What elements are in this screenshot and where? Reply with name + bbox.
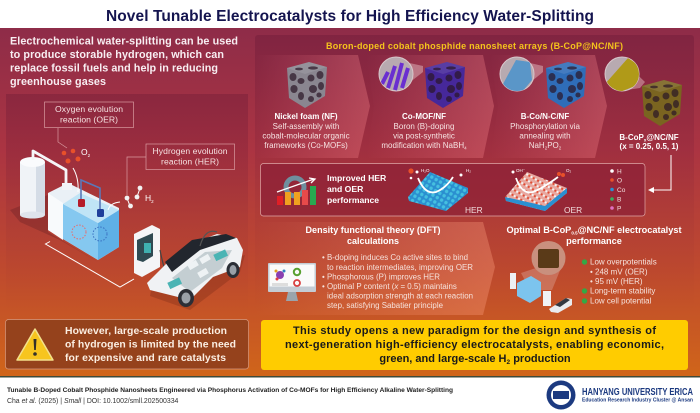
panel: DFT calculations: to reaction intermediates, improving OER xyxy=(327,263,473,272)
panel: optimal performance: performance xyxy=(566,236,622,246)
intro text xyxy=(10,36,238,88)
step: B-Co/N-C xyxy=(490,55,607,158)
step: Co-MOF xyxy=(366,55,494,158)
illustration: electrolyser and storage tank xyxy=(10,151,120,262)
panel: DFT calculations: step, satisfying Sabatier principle xyxy=(327,301,444,310)
chart: OER surface: OER xyxy=(564,205,582,215)
panel: DFT calculations: ideal adsorption strength at each reaction xyxy=(327,292,473,300)
panel: optimal performance: @NC/NF electrocatalyst xyxy=(578,225,682,235)
callout: OER: reaction (OER) xyxy=(60,114,118,124)
step: B-Co/N-C: Phosphorylation via xyxy=(510,122,580,131)
panel: improved performance xyxy=(260,164,645,216)
legend: atoms: O xyxy=(617,178,622,184)
callout: HER: Hydrogen evolution xyxy=(152,146,228,156)
step: nickel foam xyxy=(255,55,370,158)
panel: DFT calculations: • Phosphorous (P) improves HER xyxy=(322,272,440,282)
step: Co-MOF: 4 xyxy=(464,146,467,150)
citation: Cha et al. (2025) | Small | DOI: 10.1002/smll.202500334 xyxy=(7,398,179,405)
ions xyxy=(72,225,86,239)
chart: OER surface xyxy=(505,168,582,215)
callout: HER xyxy=(127,144,234,195)
title: Novel Tunable Electrocatalysts for High Efficiency Water-Splitting xyxy=(106,8,594,25)
step: B-Co/N-C: B-Co/N-C/NF xyxy=(521,112,569,121)
list: performance bullets: • 95 mV (HER) xyxy=(590,277,643,286)
chart: OER surface: O₂ xyxy=(566,168,572,173)
panel: DFT calculations: Density functional theory (DFT) xyxy=(306,225,440,235)
electrodes xyxy=(81,180,100,210)
step: B-CoP final: x xyxy=(644,138,647,142)
panel: warning: for expensive and rare catalysts xyxy=(65,353,226,364)
intro text: to produce storable hydrogen, which can xyxy=(10,49,224,61)
panel: left illustration backdrop xyxy=(6,94,248,314)
step: B-CoP final: B-CoP xyxy=(619,133,644,142)
list: performance bullets: Long-term stability xyxy=(590,286,655,296)
legend: atoms: B xyxy=(617,196,621,204)
step: B-Co/N-C: NaH xyxy=(529,141,545,150)
logo: university name: Education Research Industry Cluster @ Ansan xyxy=(582,398,693,404)
panel: DFT calculations: • B-doping induces Co active sites to bind xyxy=(322,253,468,262)
panel: warning: However, large-scale production xyxy=(65,326,227,337)
chart: OER surface: OH⁻ xyxy=(516,168,526,173)
chart: HER surface: HER xyxy=(465,205,483,215)
step: B-Co/N-C: annealing with xyxy=(519,132,571,140)
panel: DFT calculations: calculations xyxy=(347,236,399,246)
icon: oxygen molecules xyxy=(62,147,91,164)
panel: improved performance: performance xyxy=(327,195,379,205)
icon: oxygen molecules: 2 xyxy=(88,153,91,158)
legend: atoms: P xyxy=(617,206,621,212)
icon: gear and bars xyxy=(277,178,316,205)
chart: HER surface: H₂ xyxy=(466,168,471,173)
icon: hydrogen molecules: H xyxy=(145,193,151,203)
panel: DFT calculations xyxy=(255,222,495,315)
panel: warning xyxy=(6,320,248,369)
storage tank xyxy=(20,157,45,218)
chart: HER surface: H₂O xyxy=(421,168,430,173)
step: Co-MOF: Boron (B)-doping xyxy=(394,122,454,131)
panel: optimal performance: 0.5 xyxy=(571,230,578,236)
panel: conclusion: production xyxy=(510,353,571,365)
list: performance bullets: • 248 mV (OER) xyxy=(590,268,648,276)
step: nickel foam: cobalt-molecular organic xyxy=(262,132,350,140)
panel: warning: of hydrogen is limited by the need xyxy=(65,340,236,350)
list: performance bullets: Low overpotentials xyxy=(590,258,657,266)
legend: atoms: Co xyxy=(617,187,626,194)
callout: HER: reaction (HER) xyxy=(161,156,219,166)
arrow: to performance box xyxy=(648,155,671,193)
panel: improved performance: Improved HER xyxy=(327,173,387,183)
callout: OER xyxy=(44,102,134,148)
chart: HER surface xyxy=(408,168,483,215)
step: B-CoP final xyxy=(605,57,682,151)
circuit line xyxy=(46,242,134,287)
step: nickel foam: Nickel foam (NF) xyxy=(274,112,338,121)
callout: OER: Oxygen evolution xyxy=(55,104,123,114)
icon: warning triangle xyxy=(17,329,53,360)
intro text: Electrochemical water-splitting can be used xyxy=(10,36,238,48)
step: B-CoP final: (x = 0.25, 0.5, 1) xyxy=(620,142,679,151)
logo: university name xyxy=(582,387,693,404)
step: B-Co/N-C: PO xyxy=(547,141,559,150)
illustration: charging station xyxy=(134,225,167,277)
icon: hydrogen molecules: 2 xyxy=(151,199,154,204)
intro text: replace fossil fuels and help in reducing xyxy=(10,62,218,74)
arrows xyxy=(73,168,78,192)
pipe xyxy=(33,151,66,186)
icon: mini system xyxy=(510,241,572,313)
panel: improved performance: and OER xyxy=(327,184,364,194)
step: Co-MOF: modification with NaBH xyxy=(381,141,464,150)
step: B-CoP final: @NC/NF xyxy=(646,133,679,142)
panel: DFT calculations: • Optimal P content (x = 0.5) maintains xyxy=(322,282,457,291)
illustration: hydrogen car xyxy=(147,231,245,310)
step: B-Co/N-C: 2 xyxy=(545,146,548,150)
citation xyxy=(7,387,453,405)
icon: monitor xyxy=(268,263,316,301)
panel: optimal performance xyxy=(506,225,682,313)
step: nickel foam: Self-assembly with xyxy=(273,122,339,131)
panel: conclusion: This study opens a new paradigm for the design and synthesis of xyxy=(293,325,656,337)
citation: Tunable B-Doped Cobalt Phosphide Nanosheets Engineered via Phosphorus Activation of Co-MOFs for High Efficiency Alkaline Water-Splitting xyxy=(7,387,453,394)
panel: conclusion: 2 xyxy=(507,359,511,366)
intro text: greenhouse gases xyxy=(10,76,106,88)
logo: university seal xyxy=(546,380,576,410)
step: Co-MOF: via post-synthetic xyxy=(393,132,455,140)
list: performance bullets xyxy=(582,258,657,306)
icon: hydrogen molecules xyxy=(125,186,154,208)
panel: synthesis backdrop xyxy=(255,35,694,315)
step: Co-MOF: Co-MOF/NF xyxy=(402,112,446,121)
heading: synthesis: Boron-doped cobalt phosphide nanosheet arrays (B-CoP@NC/NF) xyxy=(326,41,623,51)
icon: oxygen molecules: O xyxy=(81,147,88,157)
panel: conclusion: green, and large-scale H xyxy=(379,353,507,365)
panel: conclusion xyxy=(261,320,688,370)
legend: atoms xyxy=(610,168,626,212)
step: nickel foam: frameworks (Co-MOFs) xyxy=(264,141,348,150)
step: B-Co/N-C: 2 xyxy=(559,146,562,150)
footer rule xyxy=(0,376,700,378)
legend: atoms: H xyxy=(617,168,622,176)
panel: conclusion: next-generation high-efficiency electrocatalysts, enabling economic, xyxy=(285,339,664,351)
list: performance bullets: Low cell potential xyxy=(590,296,652,306)
tank body xyxy=(48,183,119,260)
panel: optimal performance: Optimal B-CoP xyxy=(506,225,571,235)
